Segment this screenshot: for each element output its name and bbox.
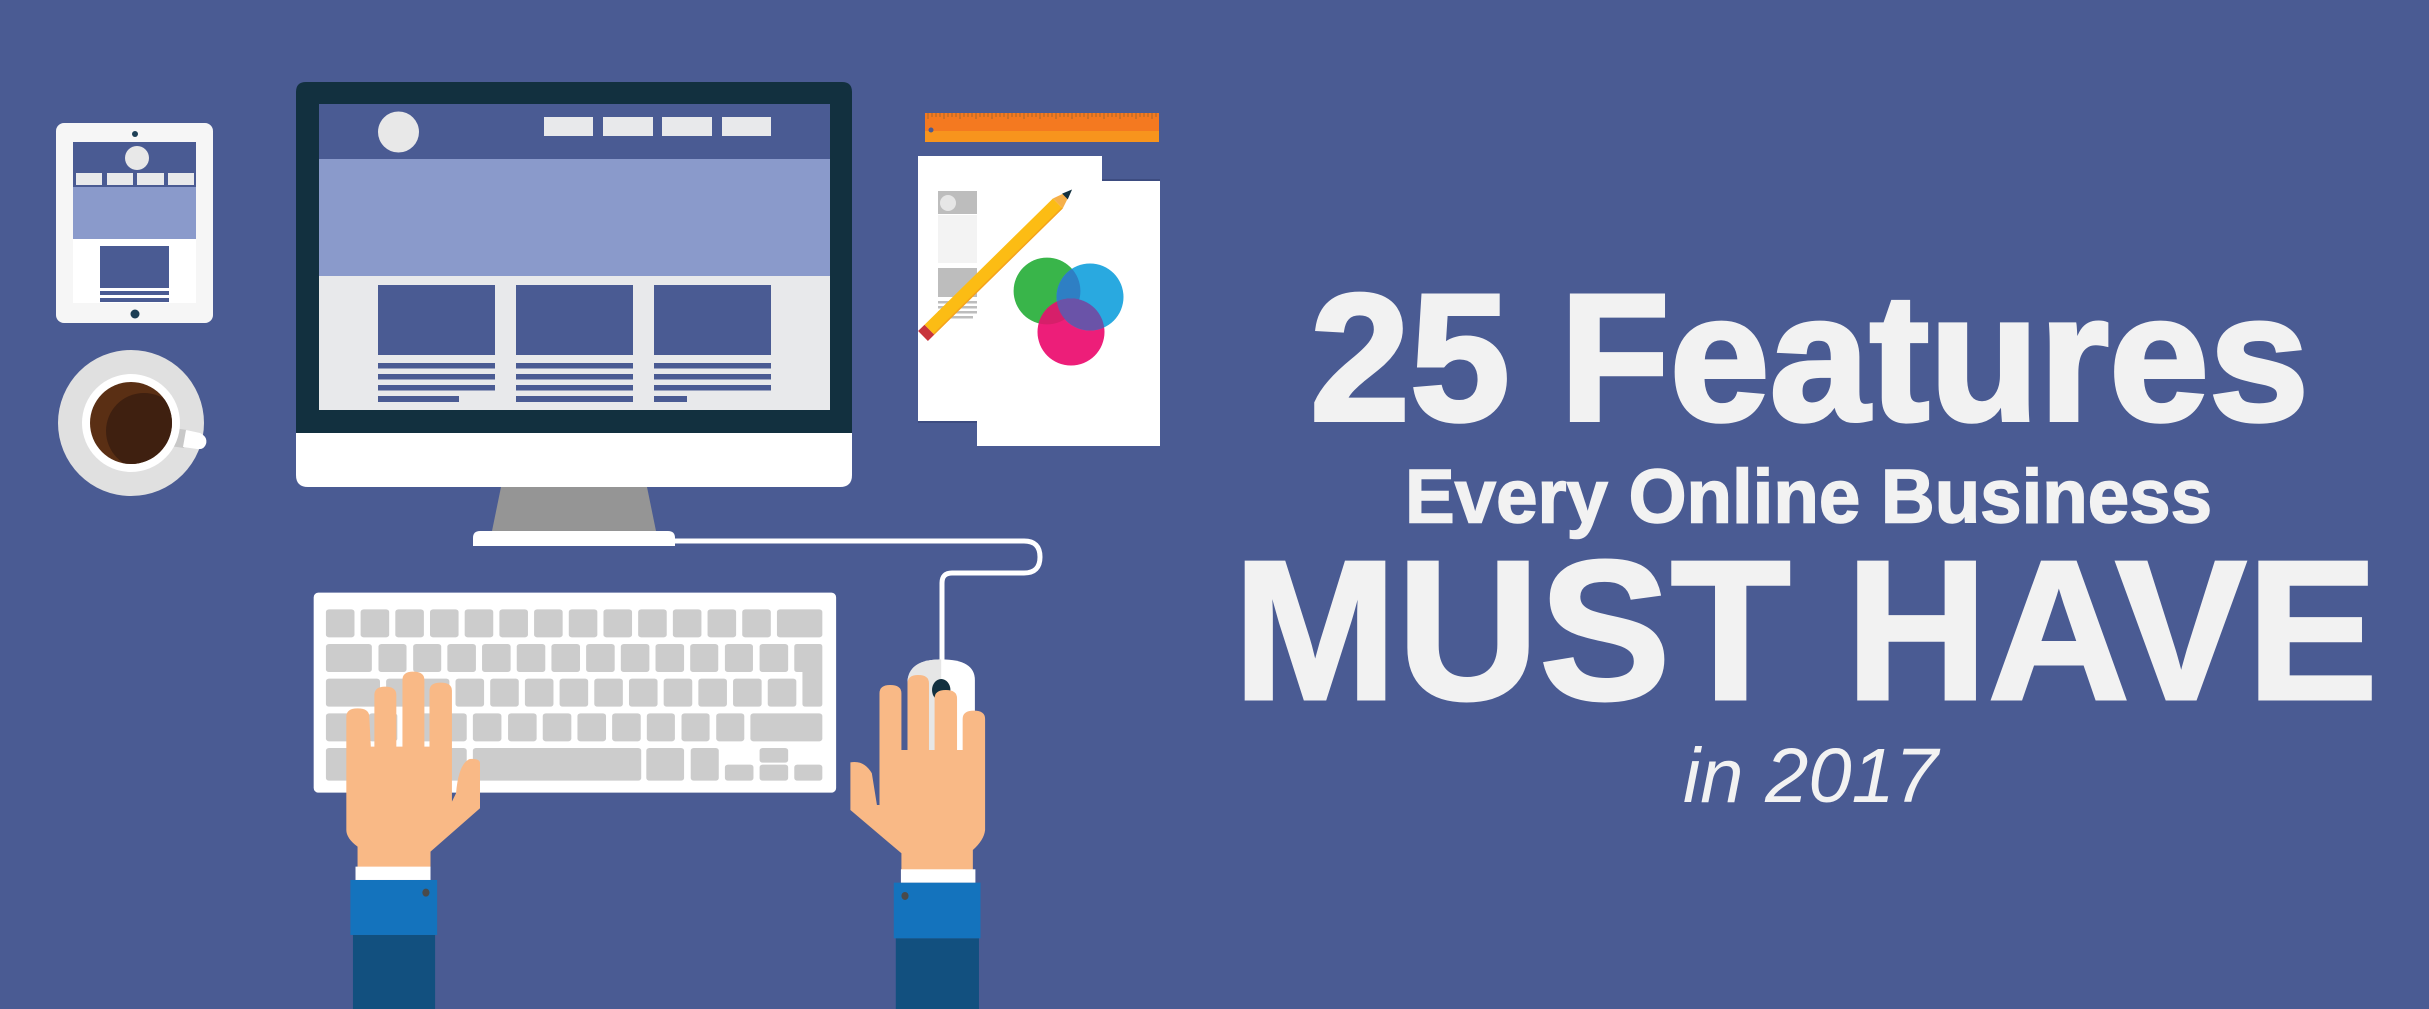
wireframe sketch — [938, 191, 977, 318]
title: MUST HAVE: MUST HAVE — [1233, 520, 2378, 742]
website mockup on screen — [319, 104, 830, 410]
mouse cable — [675, 541, 1040, 665]
icon: ruler — [925, 113, 1159, 142]
icon: right hand and sleeve — [850, 675, 985, 1009]
colour circles — [1014, 258, 1124, 366]
icon: tablet — [56, 123, 213, 323]
subtitle: Every Online Business: Every Online Business — [1405, 454, 2212, 540]
monitor body — [296, 82, 852, 433]
panel: design papers — [918, 156, 1160, 446]
monitor base — [473, 531, 675, 546]
icon: desktop monitor — [296, 82, 852, 546]
title: 25 Features: 25 Features — [1310, 257, 2309, 459]
monitor stand — [492, 487, 656, 531]
keyboard — [314, 593, 836, 793]
monitor chin — [296, 433, 852, 487]
text: in 2017: in 2017 — [1683, 733, 1941, 819]
icon: coffee cup — [58, 350, 206, 496]
icon: pencil — [918, 185, 1077, 341]
icon: left hand and sleeve — [346, 672, 480, 1009]
icon: mouse — [908, 659, 975, 752]
